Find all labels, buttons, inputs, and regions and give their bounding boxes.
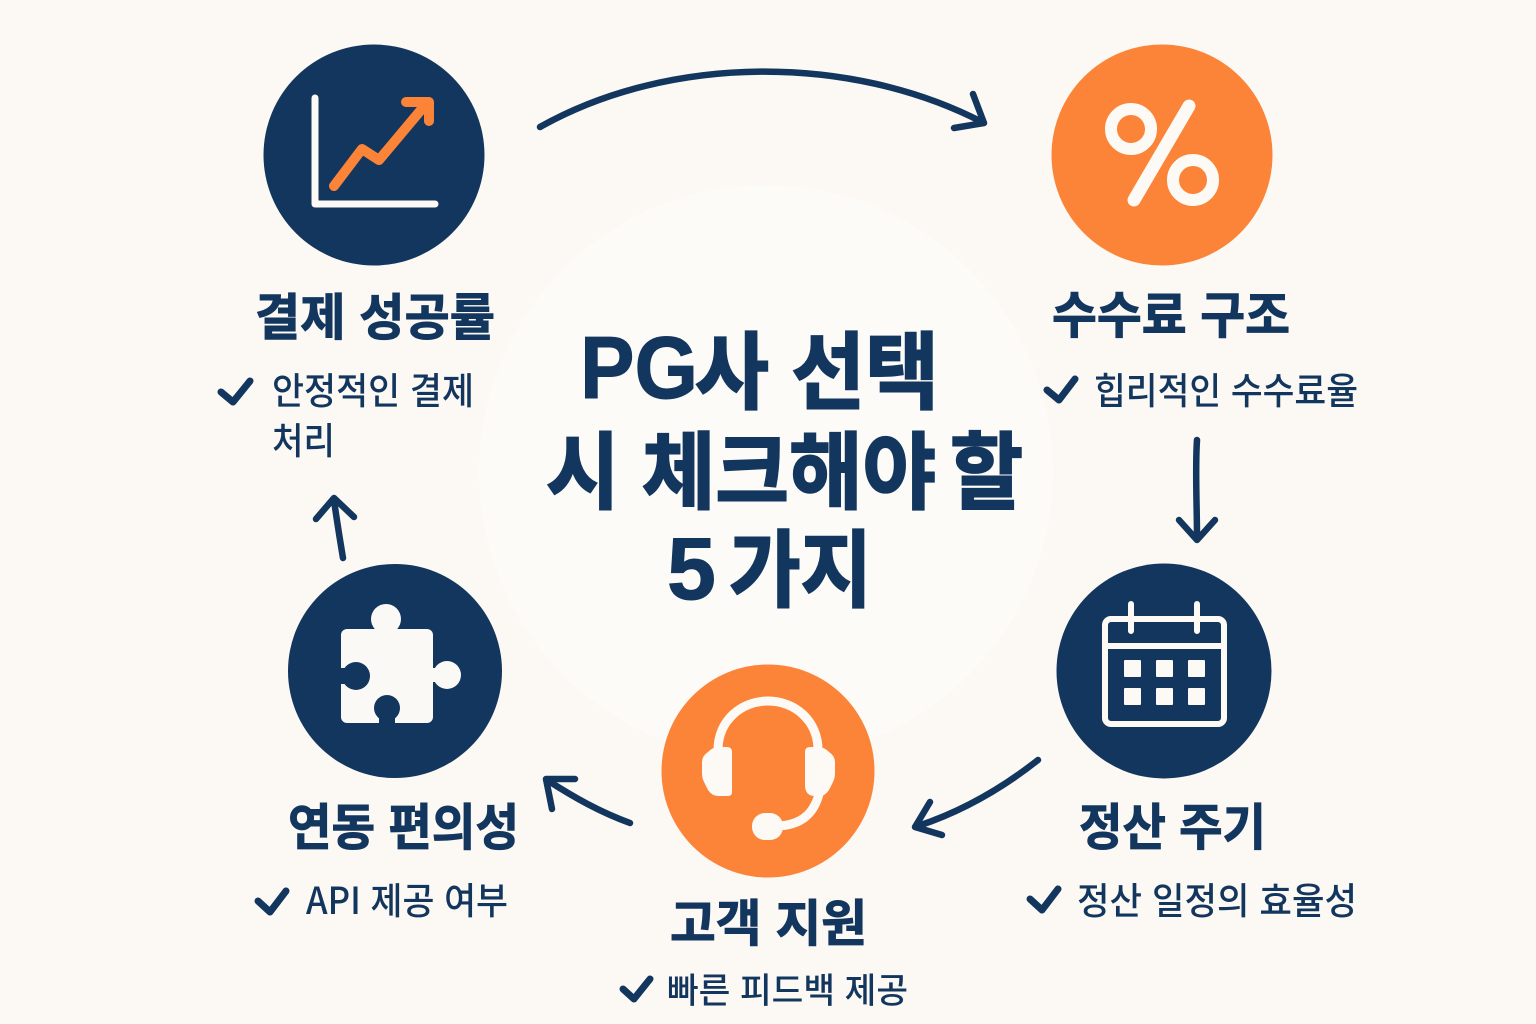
title: 시 체크해야 xyxy=(546,406,936,527)
icon: puzzle piece xyxy=(288,564,502,778)
title: 할 xyxy=(950,406,1023,527)
panel: integration convenience xyxy=(258,564,519,925)
check item: 힙리적인 수수료율 xyxy=(1094,361,1358,415)
arrow: settlement to support xyxy=(915,760,1038,835)
panel: customer support xyxy=(623,664,908,1014)
arrow: success rate to fee structure xyxy=(540,72,984,128)
arrow: integration to success rate xyxy=(316,498,354,558)
check item xyxy=(221,361,474,465)
check item: 안정적인 결제 xyxy=(272,361,474,415)
title: 5 xyxy=(667,519,716,618)
icon: growth chart xyxy=(264,44,484,266)
icon: percent xyxy=(1052,44,1272,266)
check item: 정산 일정의 효율성 xyxy=(1077,871,1357,925)
heading: 정산 주기 xyxy=(1079,788,1266,860)
title: 가지 xyxy=(729,504,872,625)
panel: payment success rate xyxy=(221,44,495,465)
check item: 빠른 피드백 제공 xyxy=(667,963,908,1014)
heading: 수수료 구조 xyxy=(1052,276,1290,348)
check item: API 제공 여부 xyxy=(306,871,508,925)
icon: headset xyxy=(662,664,874,878)
heading: 연동 편의성 xyxy=(288,788,519,860)
check item: 처리 xyxy=(272,411,335,465)
heading: 고객 지원 xyxy=(670,884,867,956)
arrow: support to integration xyxy=(546,779,630,823)
panel: settlement cycle xyxy=(1030,564,1357,925)
panel: fee structure xyxy=(1047,44,1358,415)
title: PG xyxy=(580,318,698,417)
title xyxy=(546,306,1023,625)
title: 사 선택 xyxy=(695,306,939,427)
icon: calendar xyxy=(1056,564,1272,778)
arrow: fee structure to settlement xyxy=(1179,440,1215,540)
heading: 결제 성공률 xyxy=(255,278,495,350)
